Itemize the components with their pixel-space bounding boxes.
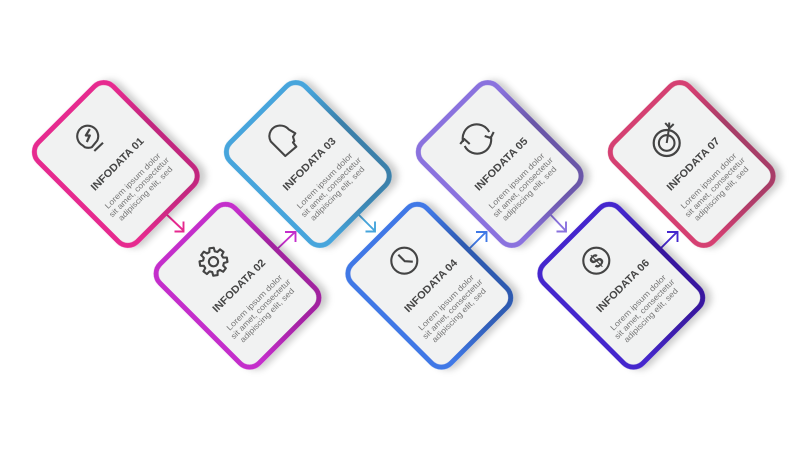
icon: clock	[391, 248, 417, 274]
panel: infodata 02	[151, 199, 324, 373]
card frame	[221, 77, 395, 251]
icon: gear	[198, 246, 229, 277]
card frame	[605, 77, 779, 251]
panel: infodata 06	[534, 199, 708, 373]
panel: infodata 03	[221, 77, 395, 251]
arrow 4 to 5	[465, 232, 486, 253]
panel: infodata 04	[342, 199, 516, 373]
body text: adipiscing elit, sed	[309, 165, 366, 223]
body text: Lorem ipsum dolor	[679, 151, 739, 211]
icon: dollar coin: $	[585, 250, 609, 273]
arrow 5 to 6	[548, 212, 566, 232]
body text: Lorem ipsum dolor	[487, 151, 547, 211]
arrow 3 to 4	[356, 212, 375, 232]
panel: infodata 05	[413, 77, 587, 251]
icon: target with dart	[654, 122, 680, 156]
card frame	[29, 77, 203, 251]
heading: INFODATA 07	[664, 135, 723, 193]
body text: adipiscing elit, sed	[117, 165, 174, 223]
heading: INFODATA 04	[402, 257, 460, 315]
arrow 1 to 2	[164, 212, 184, 232]
heading: INFODATA 02	[210, 257, 268, 315]
body text: Lorem ipsum dolor	[225, 273, 284, 332]
body text: adipiscing elit, sed	[692, 165, 750, 223]
body text: Lorem ipsum dolor	[417, 273, 476, 332]
body text: sit amet, consectetur	[491, 155, 555, 219]
body text: sit amet, consectetur	[421, 277, 485, 341]
body text: adipiscing elit, sed	[500, 165, 558, 223]
heading: INFODATA 01	[89, 135, 147, 193]
panel: infodata 07	[605, 77, 779, 251]
icon: light bulb with bolt	[77, 126, 103, 151]
card frame	[534, 199, 708, 373]
icon: refresh cycle	[460, 124, 494, 154]
heading: INFODATA 06	[594, 257, 652, 315]
body text: sit amet, consectetur	[299, 155, 363, 219]
body text: sit amet, consectetur	[107, 155, 171, 219]
heading: INFODATA 03	[281, 135, 339, 193]
body text: Lorem ipsum dolor	[609, 273, 668, 332]
card frame	[342, 199, 516, 373]
body text: Lorem ipsum dolor	[295, 151, 355, 211]
body text: adipiscing elit, sed	[238, 286, 296, 344]
body text: adipiscing elit, sed	[622, 286, 680, 344]
panel: infodata 01	[29, 77, 203, 251]
icon: head profile	[269, 126, 296, 156]
heading: INFODATA 05	[472, 135, 531, 193]
arrow 2 to 3	[273, 232, 296, 253]
body text: sit amet, consectetur	[613, 277, 677, 341]
card frame	[151, 199, 324, 373]
body text: sit amet, consectetur	[683, 155, 747, 219]
body text: Lorem ipsum dolor	[103, 151, 163, 211]
body text: sit amet, consectetur	[229, 277, 293, 341]
card frame	[413, 77, 587, 251]
arrow 6 to 7	[657, 232, 678, 252]
body text: adipiscing elit, sed	[430, 286, 488, 344]
